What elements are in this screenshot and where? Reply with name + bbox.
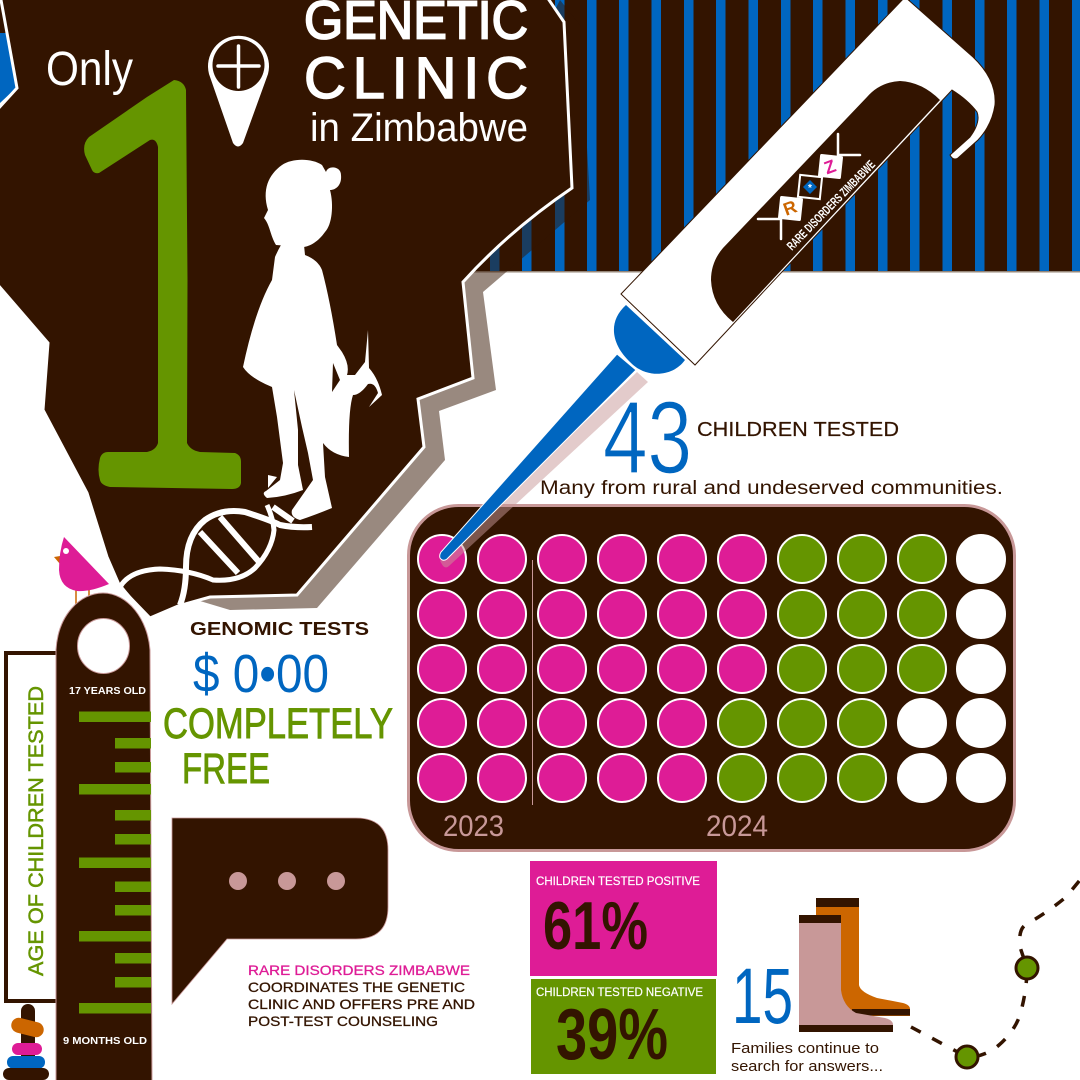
- pipette collar: [614, 305, 685, 374]
- counseling text: POST-TEST COUNSELING: [248, 1013, 438, 1029]
- year label 2024: 2024: [706, 810, 768, 843]
- logo: Rare Disorders Zimbabwe: *: [808, 183, 812, 194]
- families count: Families continue to: [731, 1040, 879, 1057]
- speech bubble: [172, 818, 388, 1004]
- genomic tests cost: GENOMIC TESTS: [190, 618, 369, 639]
- counseling text: COORDINATES THE GENETIC: [248, 979, 465, 995]
- icon: bird: [54, 537, 109, 612]
- genomic tests cost: [163, 618, 393, 793]
- pipette tip shadow: [440, 372, 648, 568]
- icon: stacking toy: [3, 1004, 49, 1080]
- striped background band: [0, 0, 1080, 272]
- positive result box: 61%: [543, 888, 648, 964]
- completely free: FREE: [182, 745, 270, 793]
- pipette label slot: [711, 81, 940, 322]
- logo: Rare Disorders Zimbabwe: R: [780, 196, 800, 220]
- positive result box: CHILDREN TESTED POSITIVE: [536, 876, 700, 888]
- path node: [956, 1046, 978, 1068]
- counseling text: [248, 962, 475, 1029]
- year label 2023: 2023: [443, 810, 504, 843]
- children tested heading: 43: [603, 380, 692, 495]
- negative result box: 39%: [556, 995, 668, 1075]
- ruler label bottom: 9 MONTHS OLD: [63, 1035, 147, 1047]
- price: $ 0•00: [193, 644, 329, 704]
- dashed journey path: [911, 880, 1080, 1068]
- completely free: [163, 700, 393, 793]
- families count: search for answers...: [731, 1058, 883, 1075]
- children tested heading: CHILDREN TESTED: [697, 419, 899, 441]
- ruler label top: 17 YEARS OLD: [69, 685, 146, 697]
- icon: boots: [799, 898, 910, 1032]
- title: Genetic Clinic in Zimbabwe: CLINIC: [304, 46, 528, 111]
- plate wells: [418, 535, 1005, 802]
- label: Only: Only: [46, 43, 133, 96]
- positive result box: [530, 861, 717, 976]
- title: Genetic Clinic in Zimbabwe: [304, 0, 528, 150]
- pipette body: [621, 0, 995, 365]
- title: Genetic Clinic in Zimbabwe: in Zimbabwe: [310, 106, 528, 150]
- pipette: [440, 0, 995, 560]
- big number 1: [84, 80, 241, 489]
- families count: 15: [732, 951, 793, 1040]
- families count: [731, 951, 883, 1075]
- map shadow: [190, 0, 590, 610]
- map of Zimbabwe: [0, 0, 572, 618]
- logo: Rare Disorders Zimbabwe: [758, 134, 878, 253]
- icon: child silhouette: [243, 160, 382, 520]
- path node: [1016, 957, 1038, 979]
- counseling text: RARE DISORDERS ZIMBABWE: [248, 962, 470, 978]
- age ruler / thermometer: [56, 593, 152, 1080]
- age of children tested label box: AGE OF CHILDREN TESTED: [25, 686, 48, 976]
- logo: Rare Disorders Zimbabwe: RARE DISORDERS ZIMBABWE: [784, 158, 878, 253]
- negative result box: [531, 979, 716, 1075]
- pipette tip: [440, 354, 636, 560]
- age of children tested label box: [6, 653, 66, 1001]
- icon: DNA helix: [120, 505, 312, 622]
- logo: Rare Disorders Zimbabwe: Z: [821, 156, 839, 178]
- test plate of 43 children: [408, 506, 1014, 850]
- ruler ticks: [79, 712, 151, 1014]
- children tested heading: Many from rural and undeserved communities.: [540, 478, 1003, 499]
- icon: location pin with plus: [208, 36, 269, 146]
- counseling text: CLINIC AND OFFERS PRE AND: [248, 996, 475, 1012]
- negative result box: CHILDREN TESTED NEGATIVE: [536, 987, 703, 999]
- completely free: COMPLETELY: [163, 700, 393, 748]
- children tested heading: [540, 380, 1003, 499]
